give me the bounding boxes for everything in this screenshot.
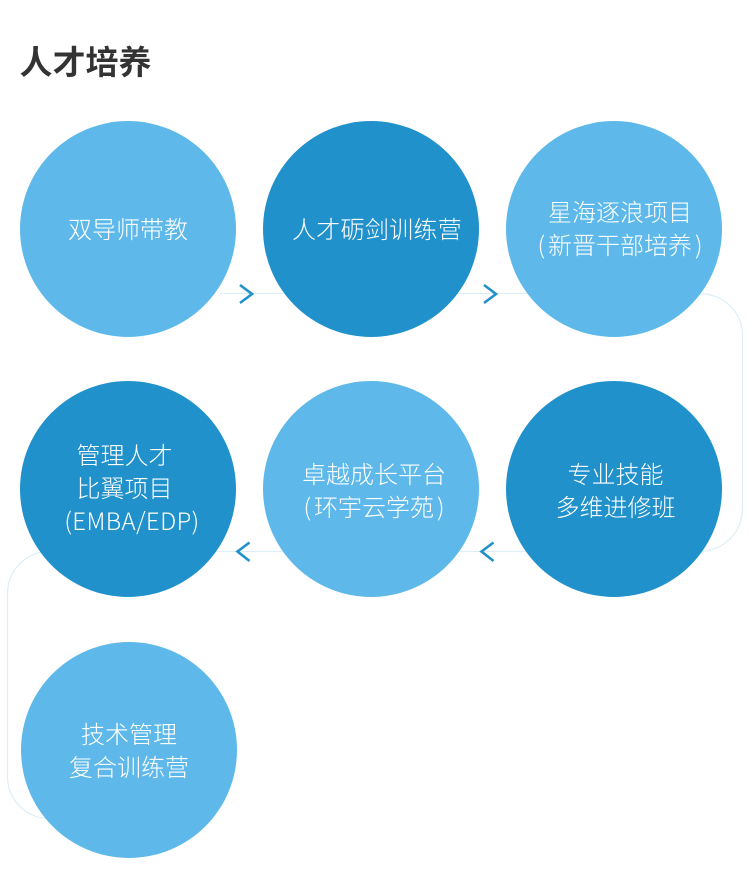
circle: 人才砺剑训练营: 人才砺剑训练营 — [292, 210, 462, 244]
circle: 管理人才比翼项目: 管理人才 — [76, 436, 172, 470]
circle: 技术管理复合训练营: 复合训练营 — [69, 748, 189, 783]
circle: 卓越成长平台 — [263, 381, 479, 597]
connector: top row to middle row — [210, 294, 742, 552]
circle: 管理人才比翼项目: (EMBA/EDP) — [64, 502, 200, 536]
circle: 星海逐浪项目: 星海逐浪项目 — [548, 192, 692, 228]
circle: 卓越成长平台: (环宇云学苑) — [303, 488, 445, 522]
arrow: step 1 to 2 — [240, 285, 252, 303]
circle: 双导师带教: 双导师带教 — [68, 210, 188, 244]
circle: 管理人才比翼项目: 比翼项目 — [76, 468, 172, 504]
arrow: step 5 to 6 — [238, 542, 250, 561]
arrow: step 4 to 5 — [482, 542, 494, 561]
circle: 专业技能多维进修班: 专业技能 — [568, 454, 664, 490]
circle: 技术管理复合训练营 — [21, 642, 237, 858]
circle: 专业技能多维进修班 — [506, 381, 722, 597]
circle: 双导师带教 — [20, 121, 236, 337]
circle: 专业技能多维进修班: 多维进修班 — [556, 488, 676, 522]
circle: 人才砺剑训练营 — [263, 121, 479, 337]
arrow: step 2 to 3 — [484, 285, 496, 303]
circle: 星海逐浪项目: (新晋干部培养) — [537, 226, 703, 260]
circle: 卓越成长平台: 卓越成长平台 — [302, 454, 446, 490]
circle: 管理人才比翼项目 — [20, 381, 236, 597]
connector: middle row to bottom row — [8, 552, 50, 818]
circle: 技术管理复合训练营: 技术管理 — [81, 715, 177, 750]
title: 人才培养 — [20, 36, 152, 84]
circle: 星海逐浪项目 — [506, 121, 722, 337]
